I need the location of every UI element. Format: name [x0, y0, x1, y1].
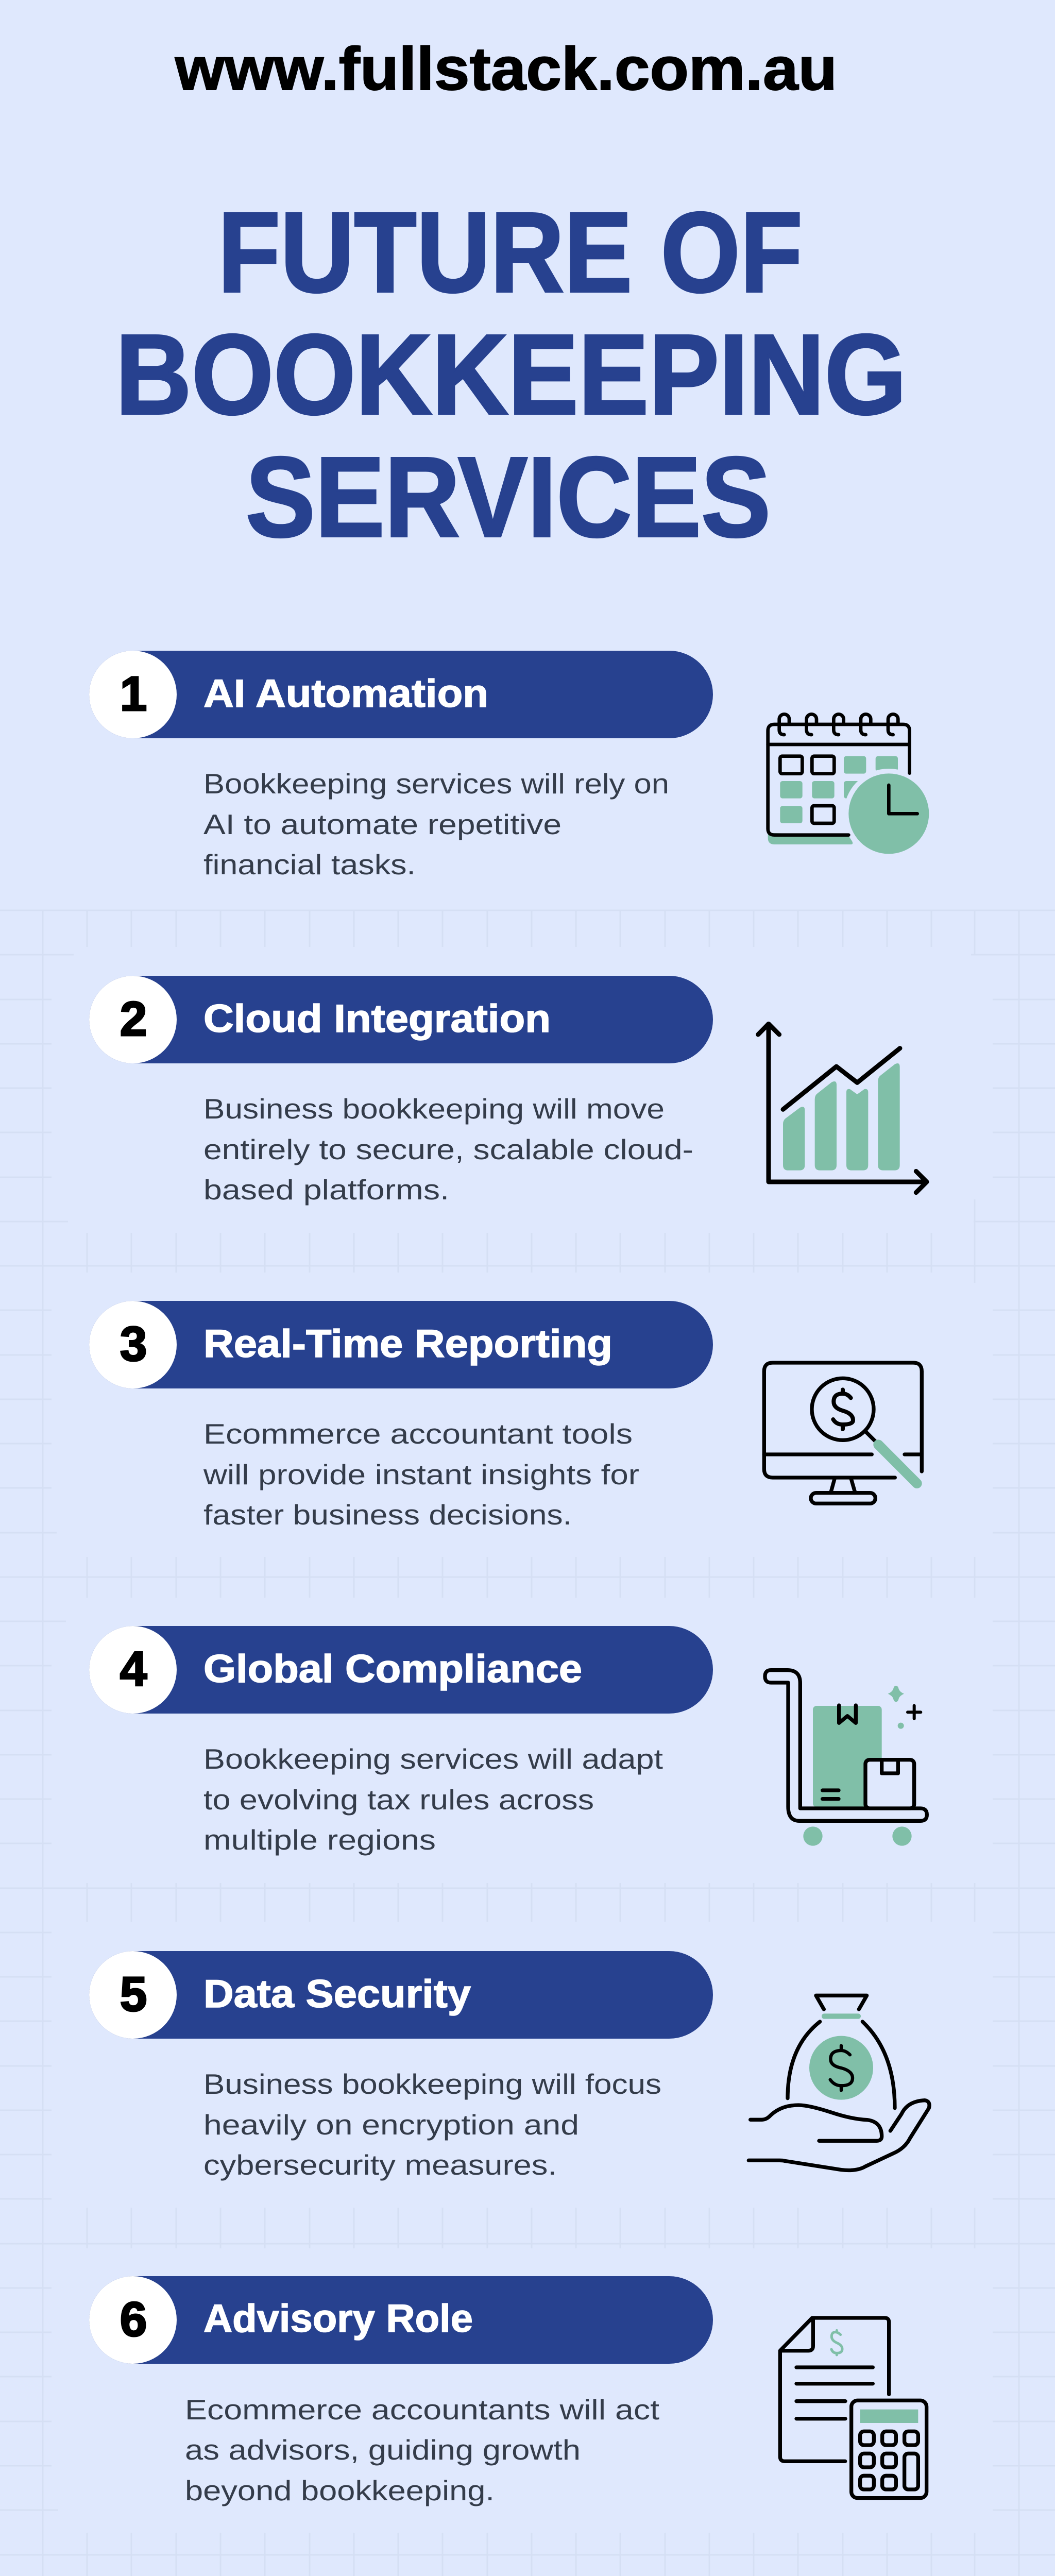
icon: monitor with magnifier — [764, 1363, 922, 1503]
description: multiple regions — [203, 1824, 436, 1856]
website url: www.fullstack.com.au — [175, 35, 837, 103]
description: Bookkeeping services will adapt — [203, 1743, 663, 1775]
heading pill — [89, 1301, 713, 1388]
icon: bar chart with trend line — [758, 1024, 927, 1193]
panel: 6 Advisory Role — [89, 2276, 927, 2506]
description: Business bookkeeping will move — [203, 1093, 665, 1125]
heading pill: Real-Time Reporting — [203, 1322, 612, 1366]
description: as advisors, guiding growth — [185, 2434, 581, 2466]
description: beyond bookkeeping. — [185, 2475, 495, 2506]
description — [203, 2068, 661, 2181]
heading pill: 6 — [120, 2292, 147, 2347]
description — [203, 1418, 639, 1531]
description: Ecommerce accountant tools — [203, 1418, 633, 1450]
description — [203, 1743, 663, 1856]
heading pill: 1 — [120, 667, 147, 721]
icon: money bag on hand — [748, 1995, 929, 2170]
description: cybersecurity measures. — [203, 2149, 557, 2181]
heading pill — [89, 1951, 713, 2039]
panel: 2 Cloud Integration — [89, 976, 927, 1206]
description: AI to automate repetitive — [203, 808, 561, 840]
description: based platforms. — [203, 1174, 449, 1206]
title — [115, 189, 907, 561]
heading pill — [89, 651, 713, 738]
description: financial tasks. — [203, 849, 416, 880]
heading pill: AI Automation — [203, 672, 488, 716]
description: Business bookkeeping will focus — [203, 2068, 661, 2100]
icon: invoice with calculator — [780, 2318, 927, 2498]
heading pill — [89, 976, 713, 1063]
title: SERVICES — [246, 433, 771, 561]
description: to evolving tax rules across — [203, 1784, 594, 1816]
title: FUTURE OF — [218, 189, 803, 316]
heading pill: 5 — [120, 1967, 147, 2022]
description: heavily on encryption and — [203, 2109, 579, 2141]
description — [185, 2394, 659, 2506]
panel: 1 AI Automation — [89, 651, 934, 880]
icon: cart with boxes — [765, 1670, 927, 1846]
description — [203, 768, 669, 880]
heading pill: Advisory Role — [203, 2297, 473, 2341]
description: Ecommerce accountants will act — [185, 2394, 659, 2426]
panel: 3 Real-Time Reporting — [89, 1301, 922, 1531]
description: will provide instant insights for — [203, 1459, 639, 1490]
heading pill: 4 — [120, 1642, 147, 1697]
heading pill: 2 — [120, 992, 147, 1046]
icon: calendar with clock — [768, 714, 934, 859]
heading pill: Data Security — [203, 1972, 471, 2016]
description — [203, 1093, 693, 1206]
title: BOOKKEEPING — [115, 311, 907, 438]
heading pill: 3 — [120, 1317, 147, 1371]
panel: 4 Global Compliance — [89, 1626, 927, 1856]
heading pill — [89, 2276, 713, 2364]
description: Bookkeeping services will rely on — [203, 768, 669, 800]
heading pill: Cloud Integration — [203, 997, 551, 1041]
panel: 5 Data Security — [89, 1951, 929, 2181]
description: faster business decisions. — [203, 1499, 572, 1531]
heading pill — [89, 1626, 713, 1714]
heading pill: Global Compliance — [203, 1647, 582, 1691]
description: entirely to secure, scalable cloud- — [203, 1133, 693, 1165]
